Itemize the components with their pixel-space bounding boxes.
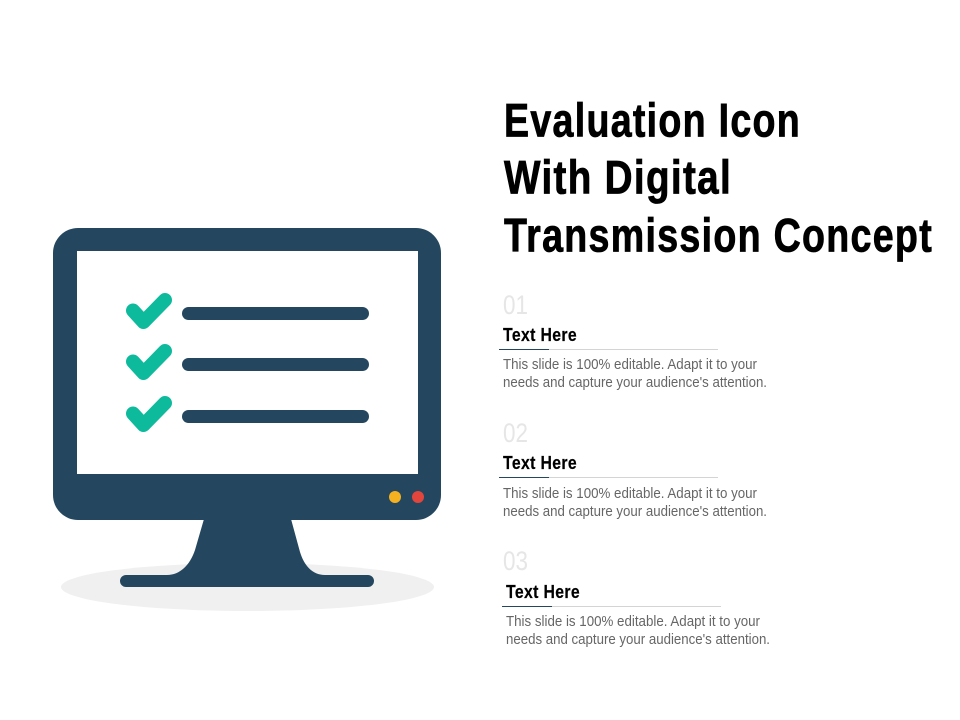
item 03 body: needs and capture your audience's attention. [506, 631, 770, 648]
checklist row 3 [133, 403, 369, 425]
item 02 body: needs and capture your audience's attention. [503, 503, 767, 520]
title [504, 94, 933, 262]
item 02 [499, 418, 767, 520]
monitor screen [77, 251, 418, 474]
item 03 [502, 546, 770, 648]
indicator light: red [412, 491, 424, 503]
number 01: 01 [503, 290, 528, 320]
title: Evaluation Icon [504, 94, 801, 146]
title: With Digital [504, 150, 732, 204]
item 01 body: needs and capture your audience's attention. [503, 374, 767, 391]
item 02 body: This slide is 100% editable. Adapt it to your [503, 485, 757, 502]
indicator light: yellow [389, 491, 401, 503]
number 03: 03 [503, 546, 528, 576]
item 03 heading: Text Here [506, 582, 580, 602]
icon: computer monitor with checklist [53, 228, 441, 611]
item 02 heading: Text Here [503, 453, 577, 473]
item 01 heading: Text Here [503, 325, 577, 345]
item 01 body: This slide is 100% editable. Adapt it to your [503, 356, 757, 373]
item 02 body [503, 485, 767, 520]
item 03 body [506, 613, 770, 648]
checklist row 1 [133, 300, 369, 322]
monitor shadow [61, 563, 434, 611]
item 01 [499, 290, 767, 391]
monitor stand [120, 519, 374, 587]
checklist row 2 [133, 351, 369, 373]
monitor body [53, 228, 441, 520]
item 03 body: This slide is 100% editable. Adapt it to your [506, 613, 760, 630]
number 02: 02 [503, 418, 528, 448]
item 01 body [503, 356, 767, 391]
